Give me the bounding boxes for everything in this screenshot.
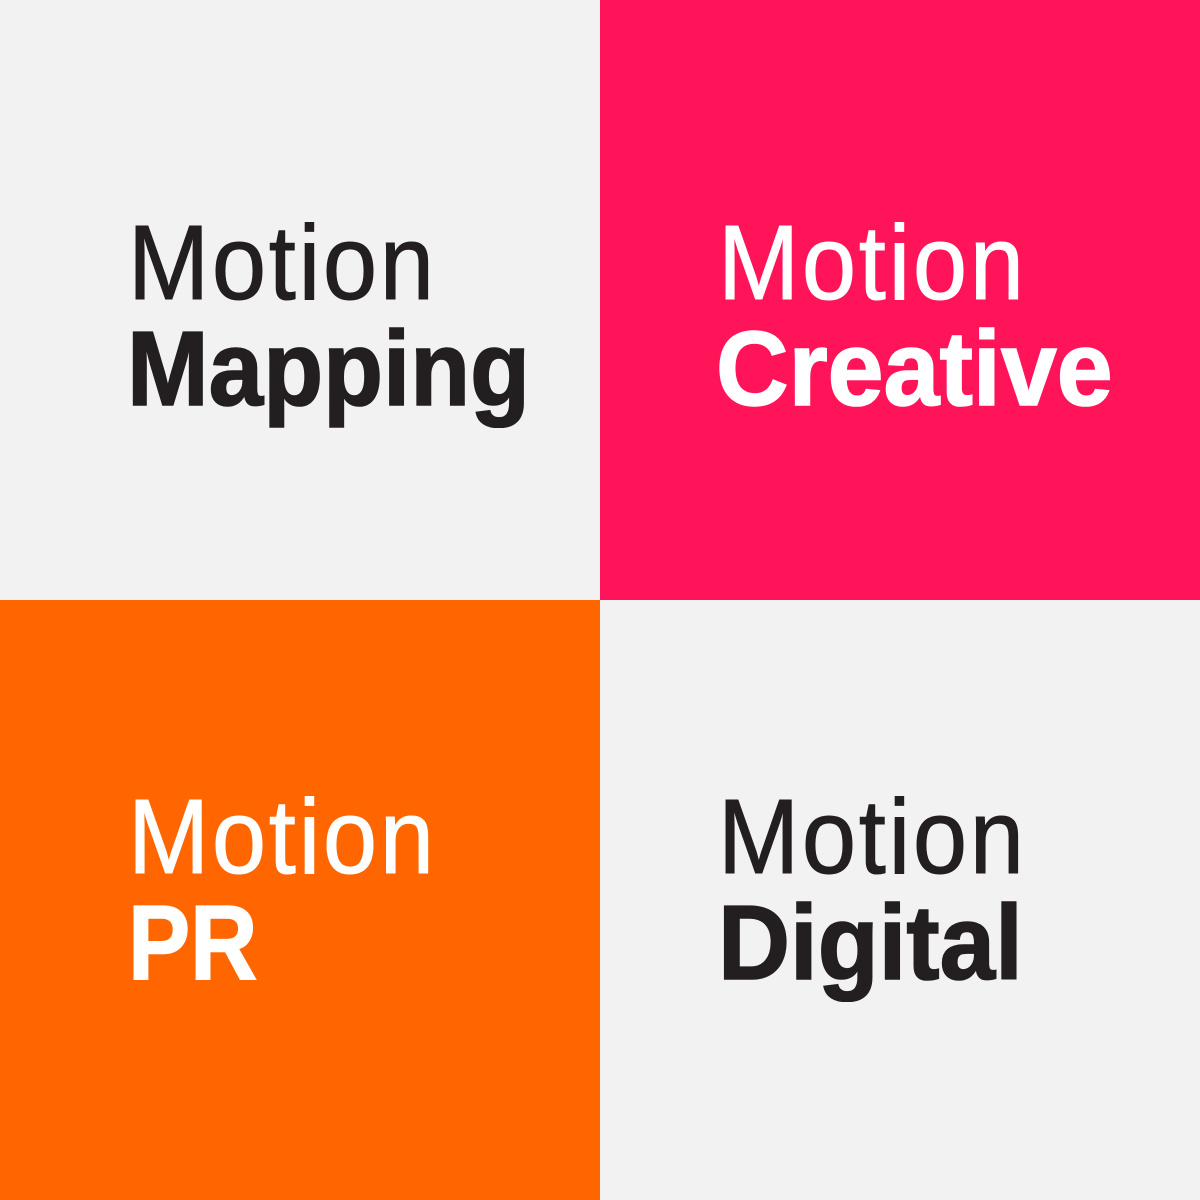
heading: Motion: Motion <box>718 204 1027 322</box>
heading: Motion: Motion <box>718 778 1027 896</box>
heading: Motion: Motion <box>128 204 437 322</box>
heading: Digital: Digital <box>718 884 1022 1002</box>
panel: Motion Creative <box>600 0 1200 600</box>
heading: Motion: Motion <box>128 778 437 896</box>
heading: Creative: Creative <box>716 310 1113 428</box>
panel: Motion Digital <box>600 600 1200 1200</box>
panel: Motion Mapping <box>0 0 600 600</box>
heading: PR: PR <box>128 884 257 1002</box>
heading: Mapping: Mapping <box>127 310 530 428</box>
panel: Motion PR <box>0 600 600 1200</box>
